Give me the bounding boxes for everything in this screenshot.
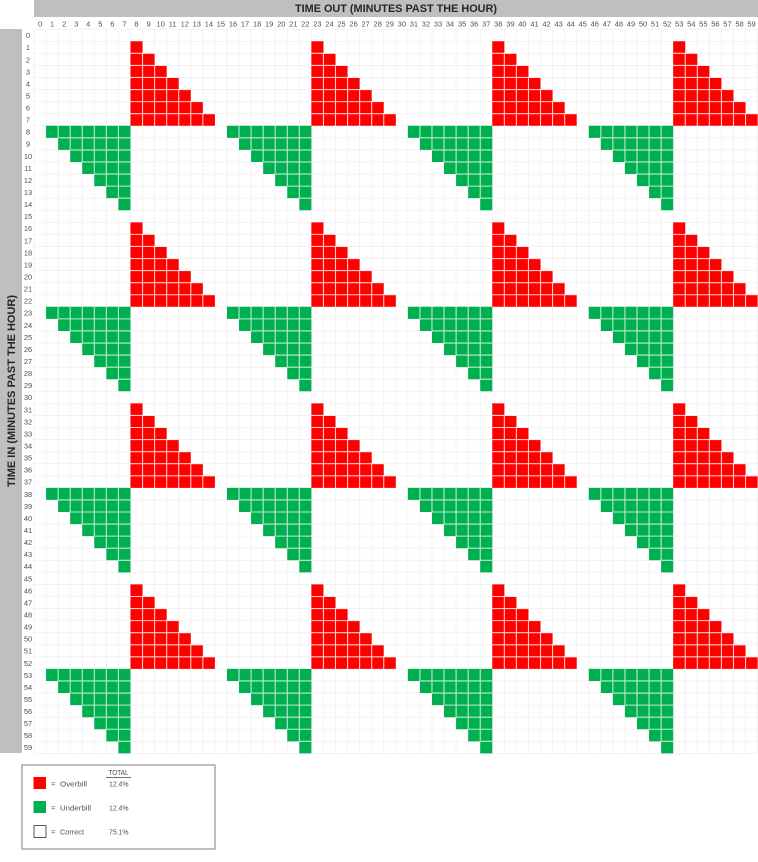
- panel: legend: [22, 765, 215, 849]
- legend: overbill: 12.4%: [109, 780, 129, 788]
- overbill triangle row 1: [130, 41, 758, 126]
- legend column heading: total: TOTAL: [108, 768, 128, 777]
- side bar: time in: [0, 29, 22, 753]
- legend: overbill: [34, 777, 129, 789]
- header bar: time out: [34, 0, 758, 17]
- underbill triangle row 1: [46, 126, 673, 210]
- underbill triangle row 3: [46, 488, 673, 572]
- underbill triangle row 4: [46, 669, 673, 753]
- column labels: [38, 20, 756, 29]
- legend: correct: Correct: [60, 828, 85, 836]
- heading: time out: TIME OUT (MINUTES PAST THE HOUR): [295, 3, 497, 15]
- overbill triangle row 4: [130, 584, 758, 669]
- row labels: [24, 31, 32, 752]
- heading: time in: TIME IN (MINUTES PAST THE HOUR): [6, 295, 18, 487]
- legend: correct: [34, 826, 129, 838]
- legend: underbill: [34, 801, 129, 813]
- legend: overbill: Overbill: [60, 780, 87, 788]
- underbill triangle row 2: [46, 307, 673, 391]
- overbill triangle row 3: [130, 403, 758, 488]
- legend: underbill: 12.4%: [109, 804, 129, 812]
- legend: underbill: =: [51, 804, 56, 812]
- legend: overbill: =: [51, 780, 56, 788]
- overbill triangle row 2: [130, 222, 758, 307]
- legend: correct: 75.1%: [109, 828, 129, 836]
- legend: underbill: Underbill: [60, 804, 91, 812]
- legend: correct: =: [51, 828, 56, 836]
